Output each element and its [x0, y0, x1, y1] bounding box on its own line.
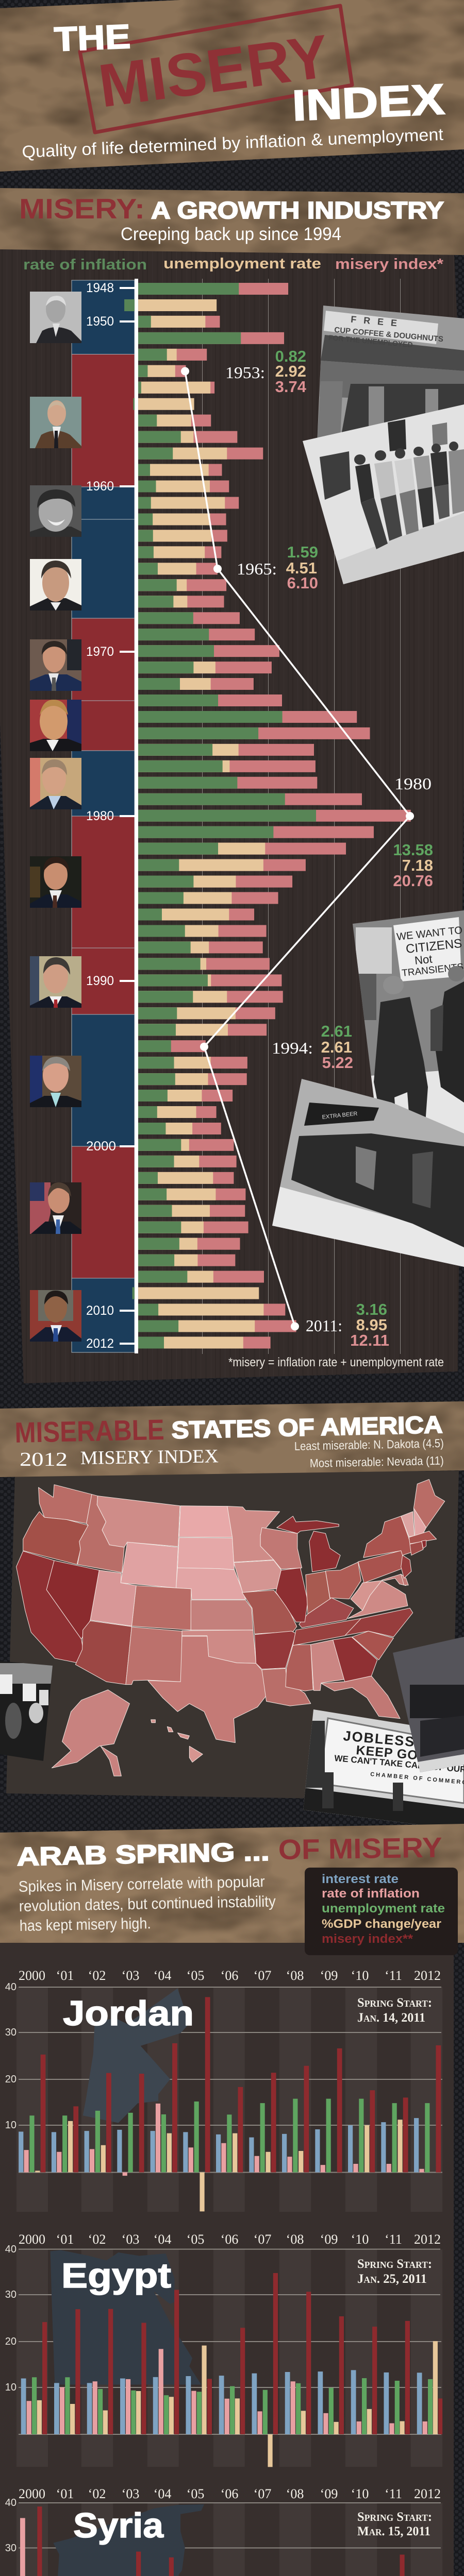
billboard text: KEEP GOING — [355, 1743, 443, 1765]
banner: arab spring of misery — [0, 1824, 464, 1943]
spring start date — [357, 1996, 432, 2025]
year labels: ‘04 — [154, 1968, 171, 1983]
banner: arab spring of misery: OF MISERY — [278, 1832, 442, 1866]
year labels: 1990 — [86, 974, 114, 988]
year labels: ‘06 — [221, 2486, 238, 2501]
chart: Egypt — [5, 2232, 442, 2467]
portrait: Eisenhower — [30, 397, 81, 448]
year labels — [19, 1968, 441, 1983]
title word: MISERY: MISERY — [95, 22, 333, 121]
callout: 1965: 4.51 — [286, 559, 317, 577]
year labels: 2000 — [19, 2486, 45, 2501]
photo: we want to be citizens protest — [353, 910, 464, 1133]
heading: MISERY: — [19, 193, 145, 225]
year labels: ‘05 — [187, 1968, 204, 1983]
year labels: 2012 — [414, 1968, 441, 1983]
callout: 2011: 2011: — [306, 1316, 342, 1335]
year labels: ‘01 — [56, 2232, 74, 2247]
axis labels: 40 — [5, 2497, 16, 2509]
year labels: 2000 — [19, 2232, 45, 2247]
portrait: Carter — [30, 758, 81, 809]
portrait: Truman — [30, 292, 81, 343]
callout: 1953: 2.92 — [275, 362, 306, 380]
photo: jobless keep going — [302, 1708, 464, 1832]
year labels: ‘05 — [187, 2486, 204, 2501]
billboard text: JOBLESS MEN — [342, 1728, 455, 1753]
year labels: ‘08 — [286, 2486, 304, 2501]
callout: 1965: 1.59 — [287, 543, 318, 561]
map: misery index by state — [16, 1479, 445, 1776]
year labels: 1970 — [86, 645, 114, 659]
callout: 1953: 1953: — [225, 363, 265, 382]
inflation bars — [124, 283, 316, 1348]
portrait: Reagan — [30, 856, 81, 908]
extremes: Least miserable: N. Dakota (4.5) — [294, 1436, 444, 1453]
chart: Syria — [5, 2486, 442, 2576]
callout: 1980 — [393, 774, 433, 890]
callout: 1994 — [272, 1022, 353, 1072]
panel: timeline wood background — [0, 249, 464, 1383]
axis labels — [5, 2244, 16, 2393]
year labels: ‘07 — [254, 2486, 271, 2501]
callout: 2011: 12.11 — [350, 1331, 389, 1349]
sign text: FREE — [350, 314, 405, 329]
protest sign — [393, 917, 461, 981]
year labels: ‘08 — [286, 1968, 304, 1983]
timeline grid — [202, 279, 400, 1354]
year labels: ‘02 — [88, 1968, 106, 1983]
year labels: ‘04 — [154, 2232, 171, 2247]
year labels: ‘03 — [122, 1968, 139, 1983]
intro text: Spikes in Misery correlate with popular — [18, 1873, 265, 1895]
axis labels: 40 — [5, 2244, 16, 2255]
axis labels — [5, 1981, 16, 2131]
stamp frame — [80, 6, 352, 132]
banner: main title — [0, 0, 464, 172]
axis labels: 40 — [5, 1981, 16, 1993]
spring start date — [357, 2510, 432, 2538]
heading: MISERABLE — [14, 1413, 164, 1449]
portrait: Johnson — [30, 559, 81, 611]
callout: 1994: 1994: — [272, 1039, 313, 1057]
axis labels: 10 — [5, 2382, 16, 2393]
callout: 1965: 1965: — [237, 560, 277, 578]
subtitle: Quality of life determined by inflation & unemployment — [22, 125, 444, 161]
spring start date: Spring Start: — [357, 1996, 432, 2010]
photo: protest crowd — [0, 1659, 54, 1762]
subheading: Creeping back up since 1994 — [121, 224, 341, 244]
queue of men — [355, 464, 374, 503]
trend line with highlighted years — [181, 367, 414, 1330]
callout: 1965 — [237, 543, 318, 592]
axis labels: 30 — [5, 2289, 16, 2300]
banner: miserable states of america: STATES OF AMERICA — [171, 1411, 443, 1444]
year labels: 2012 — [414, 2232, 441, 2247]
spring start date: Jan. 14, 2011 — [357, 2011, 425, 2025]
legend: timeline: unemployment rate — [163, 256, 321, 272]
spring start date: Spring Start: — [357, 2510, 432, 2524]
legend: arab spring: %GDP change/year — [322, 1917, 441, 1931]
year labels: 2010 — [86, 1303, 114, 1318]
protesters — [374, 997, 428, 1117]
chart: Jordan — [5, 1968, 442, 2212]
year labels: ‘10 — [351, 1968, 369, 1983]
sign text: FOR THE UNEMPLOYED — [328, 333, 413, 349]
callout: 1953: 0.82 — [275, 347, 306, 365]
legend: arab spring: interest rate — [322, 1872, 399, 1886]
legend: arab spring — [305, 1868, 458, 1955]
year labels: ‘06 — [221, 1968, 238, 1983]
year labels: ‘03 — [122, 2232, 139, 2247]
year labels: 1948 — [86, 281, 114, 295]
callout: 2011 — [306, 1300, 389, 1349]
year labels: 2012 — [86, 1336, 114, 1351]
country silhouette — [83, 1988, 188, 2123]
year labels: ‘11 — [385, 2486, 402, 2501]
crowd in coats — [342, 384, 464, 432]
legend: timeline — [23, 256, 444, 273]
callout: 1994: 5.22 — [322, 1054, 353, 1072]
sign text: CUP COFFEE & DOUGHNUTS — [334, 326, 444, 344]
year labels — [86, 281, 116, 1351]
year labels: ‘04 — [154, 2486, 171, 2501]
legend: timeline: misery index* — [335, 256, 444, 273]
photo: men at a window — [299, 402, 464, 587]
photo: we want to be citizens protest: CITIZENS — [405, 937, 462, 956]
footnote: misery formula: *misery = inflation rate + unemployment rate — [228, 1355, 444, 1369]
axis labels: 30 — [5, 2543, 16, 2554]
year labels: ‘06 — [221, 2232, 238, 2247]
spring start date: Mar. 15, 2011 — [357, 2524, 430, 2538]
legend: arab spring: rate of inflation — [322, 1887, 420, 1901]
year labels: 2000 — [86, 1139, 116, 1154]
billboard text — [334, 1728, 464, 1786]
year labels: ‘03 — [122, 2486, 139, 2501]
subheading: 2012 — [20, 1449, 68, 1470]
banner: a growth industry: A GROWTH INDUSTRY — [151, 197, 444, 224]
timeline axis with year ticks — [86, 279, 138, 1353]
year labels — [19, 2232, 441, 2247]
presidential term bands — [72, 280, 135, 1352]
photo: bread line in snow — [268, 1077, 464, 1267]
year labels: ‘09 — [320, 2486, 338, 2501]
year labels: 2000 — [19, 1968, 45, 1983]
callout: 1980: 20.76 — [393, 872, 433, 890]
spring start date — [357, 2257, 432, 2286]
callout: 1994: 2.61 — [321, 1022, 352, 1040]
country silhouette — [53, 2504, 204, 2576]
callout: 2011: 8.95 — [356, 1316, 387, 1334]
spring start date: Jan. 25, 2011 — [357, 2272, 427, 2286]
callout: 1980: 13.58 — [393, 841, 433, 859]
stacked bars: inflation, unemployment, misery by year — [124, 283, 411, 1348]
Hawaii — [189, 1746, 203, 1762]
year labels: ‘07 — [254, 2232, 271, 2247]
year labels: ‘07 — [254, 1968, 271, 1983]
country name: Egypt — [61, 2256, 171, 2295]
portrait: Clinton — [30, 1056, 81, 1107]
photo: crowd on building — [392, 1636, 464, 1775]
axis labels: 20 — [5, 2074, 16, 2085]
year labels — [19, 2486, 441, 2501]
banner: miserable states of america: MISERY INDEX — [80, 1446, 219, 1469]
callout: 1953 — [225, 347, 307, 396]
year labels: ‘11 — [385, 2232, 402, 2247]
callout: 1994: 2.61 — [321, 1038, 352, 1056]
year labels: ‘01 — [56, 2486, 74, 2501]
callout: 1980: 7.18 — [402, 856, 433, 874]
portrait: George H. W. Bush — [30, 956, 81, 1008]
year labels: 1950 — [86, 314, 114, 329]
year labels: ‘10 — [351, 2232, 369, 2247]
legend: arab spring: unemployment rate — [322, 1902, 445, 1916]
panel: map background — [6, 1471, 459, 1801]
country name: Jordan — [63, 1994, 194, 2033]
callout: 1953: 3.74 — [275, 378, 307, 396]
spring start date: Spring Start: — [357, 2257, 432, 2271]
year labels: 1960 — [86, 479, 114, 494]
callout: 1980: 1980 — [394, 774, 432, 793]
photo: free coffee and doughnuts line — [314, 304, 464, 446]
callout: 1965: 6.10 — [287, 574, 318, 592]
title word: INDEX: INDEX — [291, 75, 446, 130]
year labels: ‘08 — [286, 2232, 304, 2247]
year labels: ‘02 — [88, 2232, 106, 2247]
heading: ARAB SPRING ... — [16, 1837, 270, 1871]
portrait: Nixon — [30, 639, 81, 691]
photo: we want to be citizens protest: Not — [414, 953, 433, 967]
sign text — [329, 316, 443, 345]
year labels: 2012 — [414, 2486, 441, 2501]
legend: timeline: rate of inflation — [23, 257, 147, 273]
callout: 2011: 3.16 — [356, 1300, 387, 1318]
axis labels: 30 — [5, 2027, 16, 2038]
year labels: 1980 — [86, 809, 114, 823]
axis labels — [5, 2497, 16, 2576]
title word: THE: THE — [54, 17, 131, 58]
banner: a growth industry — [0, 188, 464, 255]
banner: miserable states of america: Most miserable: Nevada (11) — [310, 1454, 444, 1470]
country name: Syria — [73, 2506, 164, 2545]
intro text: has kept misery high. — [20, 1915, 151, 1935]
portrait: Ford — [30, 700, 81, 751]
intro text — [18, 1873, 276, 1935]
bars — [19, 1997, 441, 2211]
year labels: ‘09 — [320, 2232, 338, 2247]
country silhouette — [51, 2250, 201, 2385]
portrait: Obama — [30, 1290, 81, 1342]
Alaska — [52, 1690, 129, 1768]
unemployment bars — [138, 299, 265, 1348]
year labels: ‘01 — [56, 1968, 74, 1983]
misery bars — [138, 283, 411, 1348]
bars — [21, 2273, 442, 2467]
panel: arab spring charts — [0, 1943, 454, 2576]
year labels: ‘02 — [88, 2486, 106, 2501]
year labels: ‘09 — [320, 1968, 338, 1983]
year labels: ‘11 — [385, 1968, 402, 1983]
bars — [20, 2506, 438, 2576]
legend: arab spring: misery index** — [322, 1932, 413, 1946]
portrait: Kennedy — [30, 485, 81, 537]
year labels: ‘10 — [351, 2486, 369, 2501]
photo: we want to be citizens protest: TRANSIENTS — [401, 962, 464, 979]
banner: miserable states of america — [0, 1401, 464, 1477]
axis labels: 20 — [5, 2336, 16, 2347]
axis labels: 10 — [5, 2120, 16, 2131]
portrait: George W. Bush — [30, 1182, 81, 1234]
shop awning text: EXTRA BEER — [322, 1111, 358, 1121]
year labels: ‘05 — [187, 2232, 204, 2247]
intro text: revolution dates, but continued instability — [19, 1893, 276, 1915]
